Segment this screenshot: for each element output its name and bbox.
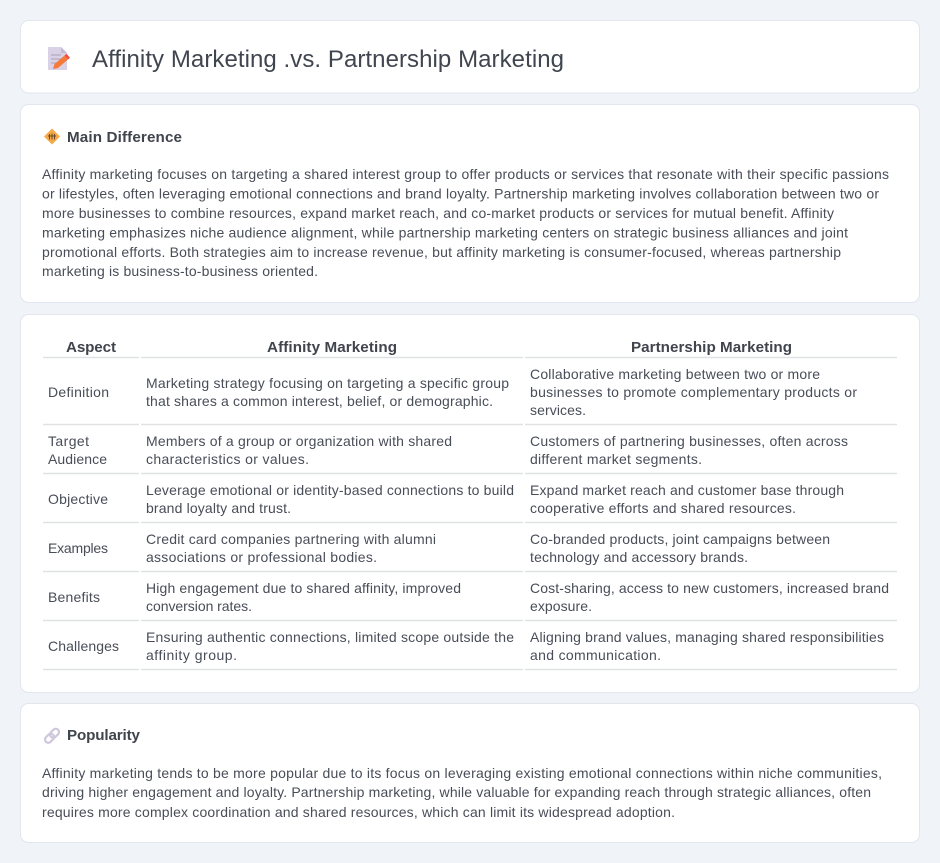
table row: definition: Marketing strategy focusing on targeting a specific group: [146, 375, 509, 391]
panel: main difference: [20, 104, 920, 302]
table row: target audience: different market segments.: [530, 451, 702, 467]
text block: main difference paragraph: [42, 166, 889, 279]
table row: benefits: conversion rates.: [146, 598, 252, 614]
text block: popularity paragraph: driving higher engagement and loyalty. Partnership marketing, while valuable for expanding reach through strategic alliances, often: [42, 784, 871, 800]
table row: definition: that shares a common interest, belief, or demographic.: [146, 393, 493, 409]
text block: main difference paragraph: marketing is business-to-business oriented.: [42, 263, 318, 279]
text block: main difference paragraph: promotional efforts. Both strategies aim to increase revenue, but affinity marketing is consumer-focused, whereas partnership: [42, 244, 841, 260]
table row: objective: [43, 482, 897, 522]
table row: benefits: exposure.: [530, 598, 592, 614]
table header row: Partnership Marketing: [631, 339, 792, 356]
table row: definition: [43, 366, 897, 424]
table row: examples: Credit card companies partnering with alumni: [146, 531, 436, 547]
text block: main difference paragraph: marketing emphasizes niche audience alignment, while partnership marketing centers on strategic business alliances and joint: [42, 224, 848, 240]
table row: definition: services.: [530, 402, 586, 418]
text block: popularity paragraph: Affinity marketing tends to be more popular due to its focus on leveraging existing emotional connections within niche communities,: [42, 765, 882, 781]
icon: orange diamond sign: [44, 128, 60, 144]
table row: benefits: Benefits: [48, 589, 100, 605]
heading: popularity: Popularity: [67, 727, 141, 744]
table row: objective: Objective: [48, 491, 108, 507]
panel: popularity: [20, 704, 920, 842]
text block: popularity paragraph: [42, 765, 882, 820]
table row: objective: Expand market reach and customer base through: [530, 482, 844, 498]
table row: objective: cooperative efforts and shared resources.: [530, 500, 796, 516]
table row: definition: Collaborative marketing between two or more: [530, 366, 820, 382]
table row: benefits: High engagement due to shared affinity, improved: [146, 580, 461, 596]
table row: challenges: Aligning brand values, managing shared responsibilities: [530, 629, 884, 645]
table row: target audience: Audience: [48, 451, 107, 467]
table row: target audience: Members of a group or organization with shared: [146, 433, 452, 449]
table row: examples: [43, 531, 897, 572]
table row: objective: brand loyalty and trust.: [146, 500, 291, 516]
table row: challenges: Ensuring authentic connections, limited scope outside the: [146, 629, 514, 645]
table header row: [43, 339, 897, 358]
table row: challenges: [43, 629, 897, 670]
table row: challenges: affinity group.: [146, 647, 237, 663]
table row: target audience: Target: [48, 433, 89, 449]
text block: main difference paragraph: Affinity marketing focuses on targeting a shared interest group to offer products or services that resonate with their specific passions: [42, 166, 889, 182]
text block: main difference paragraph: or lifestyles, often leveraging emotional connections and brand loyalty. Partnership marketing involves collaboration between two or: [42, 186, 879, 202]
table row: examples: associations or professional bodies.: [146, 549, 377, 565]
panel: title header: [20, 20, 920, 93]
table header row: Aspect: [66, 339, 116, 356]
panel: comparison table: [20, 314, 920, 692]
table row: definition: Definition: [48, 384, 109, 400]
table row: examples: technology and accessory brands.: [530, 549, 748, 565]
table row: target audience: characteristics or values.: [146, 451, 309, 467]
table row: challenges: and communication.: [530, 647, 661, 663]
table row: benefits: [43, 580, 897, 620]
table row: definition: businesses to promote complementary products or: [530, 384, 857, 400]
table header row: Affinity Marketing: [267, 339, 397, 356]
table row: examples: Examples: [48, 540, 108, 556]
table row: examples: Co-branded products, joint campaigns between: [530, 531, 830, 547]
text block: main difference paragraph: more businesses to combine resources, expand market reach, and co-market products or services for mutual benefit. Affinity: [42, 205, 834, 221]
heading: main difference: Main Difference: [67, 129, 182, 146]
table row: target audience: Customers of partnering businesses, often across: [530, 433, 848, 449]
text block: popularity paragraph: requires more complex coordination and shared resources, which can limit its widespread adoption.: [42, 804, 675, 820]
table row: target audience: [43, 433, 897, 474]
table row: benefits: Cost-sharing, access to new customers, increased brand: [530, 580, 889, 596]
table row: objective: Leverage emotional or identity-based connections to build: [146, 482, 514, 498]
icon: document with pencil: [48, 47, 70, 70]
table row: challenges: Challenges: [48, 638, 119, 654]
title: Affinity Marketing .vs. Partnership Marketing: [92, 46, 564, 73]
icon: chain link: [44, 727, 60, 744]
